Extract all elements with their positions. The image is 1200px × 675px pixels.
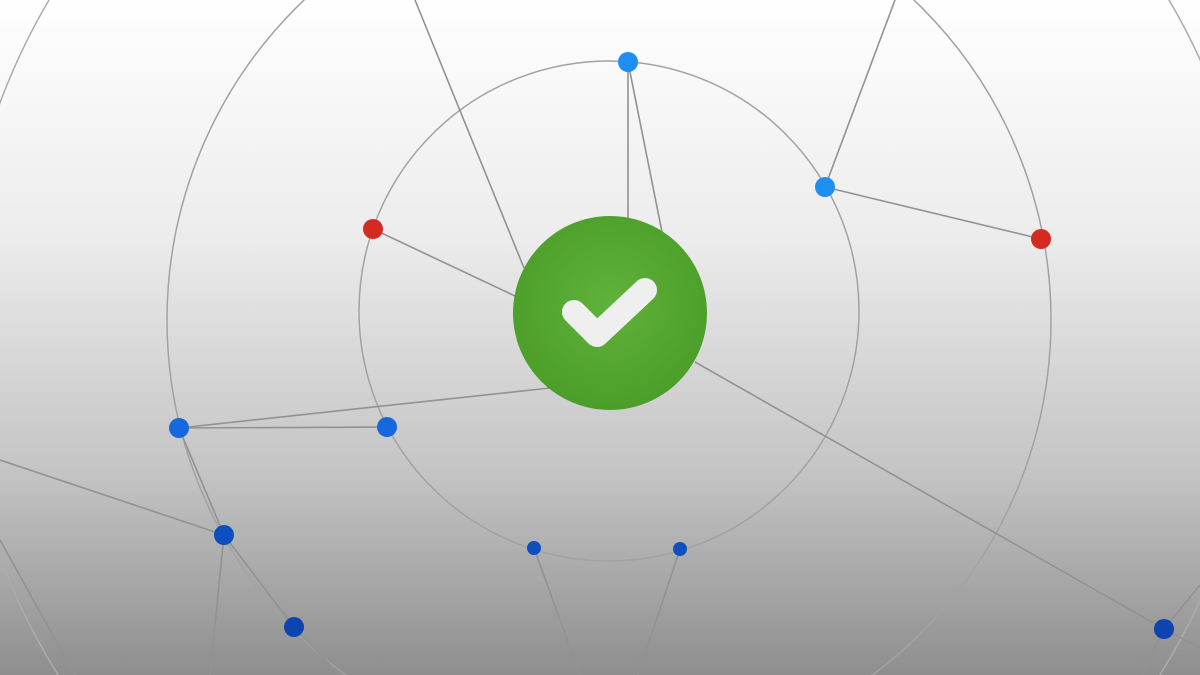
icon: green check badge xyxy=(513,216,707,410)
nodes xyxy=(169,52,1174,639)
